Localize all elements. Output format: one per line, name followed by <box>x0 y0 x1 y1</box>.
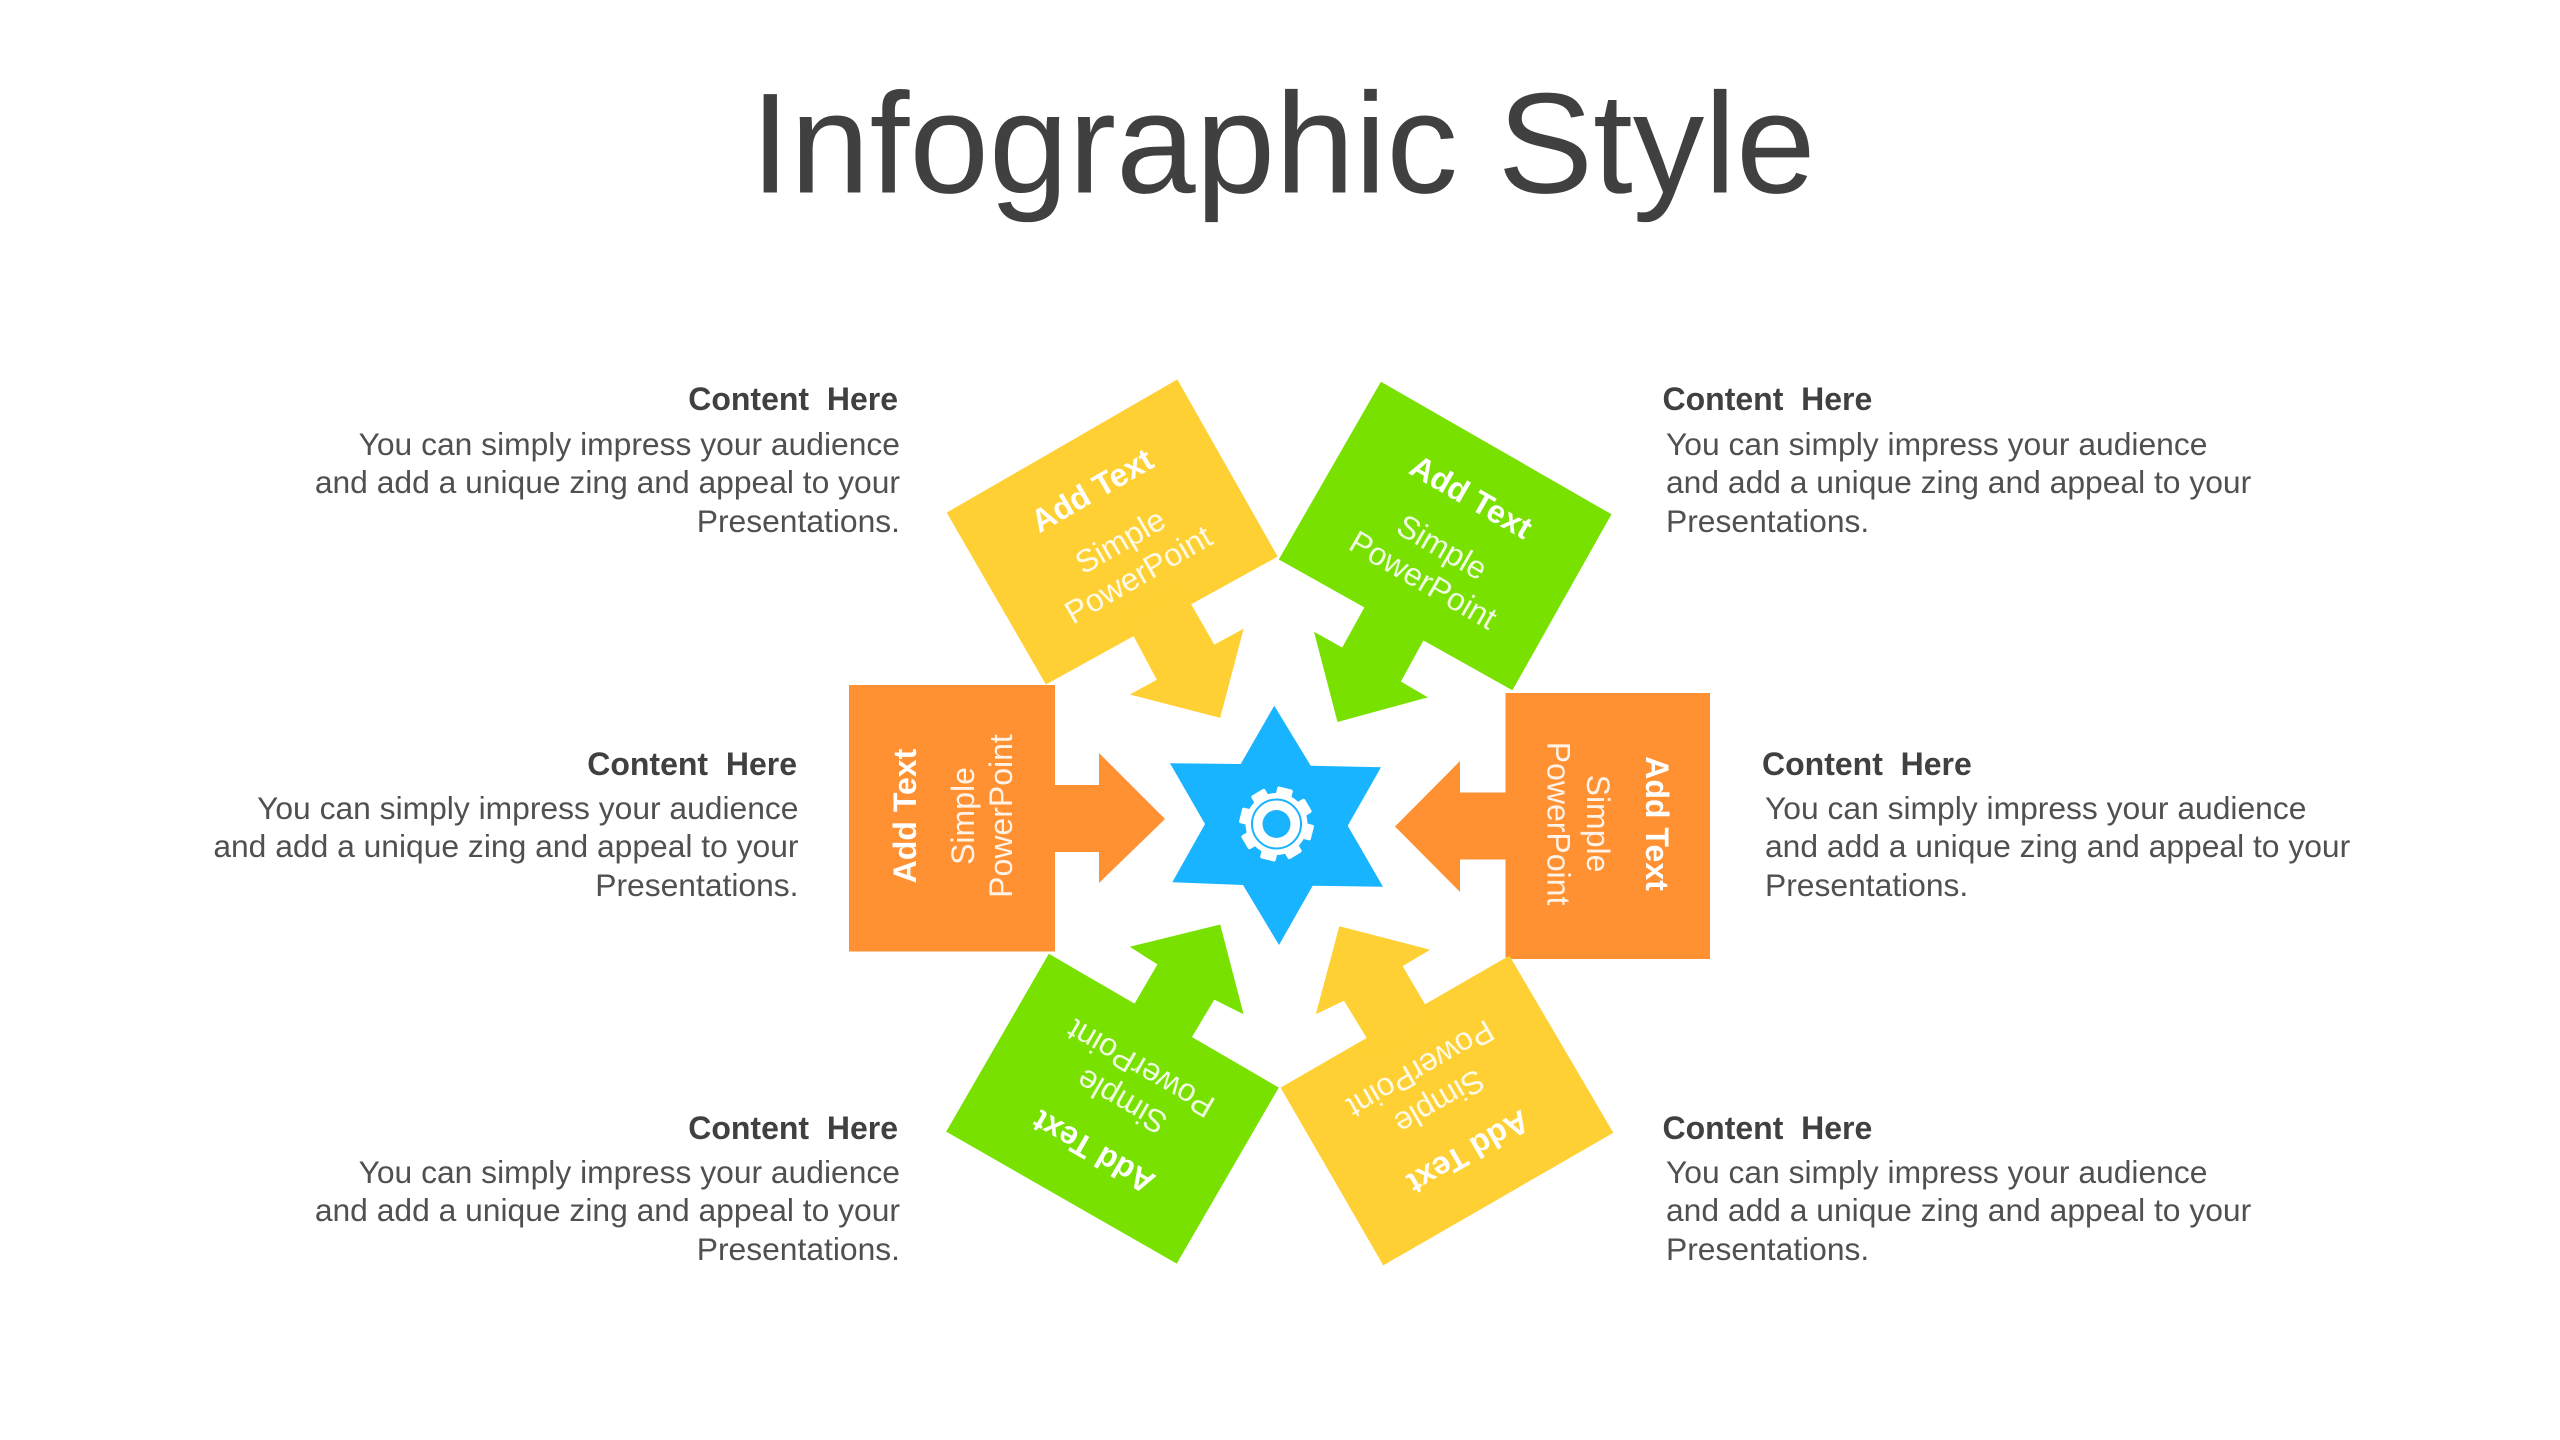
text block: bottom left: and add a unique zing and appeal to your <box>315 1192 900 1228</box>
text block: middle left: Content Here <box>587 746 797 782</box>
text block: bottom right: and add a unique zing and appeal to your <box>1666 1192 2252 1228</box>
left box text <box>887 734 1019 898</box>
text block: top left: Presentations. <box>697 503 900 539</box>
top-left box shape <box>947 379 1278 684</box>
icon: gear <box>1239 786 1314 862</box>
bottom-left arrow <box>1125 924 1244 1052</box>
text block: bottom left <box>315 1110 900 1267</box>
top-right arrow <box>1314 590 1433 722</box>
text block: middle left <box>213 746 799 903</box>
left box text: PowerPoint <box>983 734 1019 898</box>
text block: top right <box>1662 381 2252 539</box>
text block: top right: and add a unique zing and appeal to your <box>1666 464 2252 500</box>
left box text: Add Text <box>887 748 923 883</box>
bottom-left box text: PowerPoint <box>1061 1012 1221 1125</box>
text block: top left <box>315 381 900 539</box>
panel: right orange arrow box <box>1395 693 1710 959</box>
panel: bottom-right yellow arrow box <box>1281 926 1613 1265</box>
bottom-left box text <box>1013 1012 1221 1208</box>
bottom-right box shape <box>1281 956 1613 1265</box>
text block: middle left: Presentations. <box>595 867 798 903</box>
text block: bottom left: Presentations. <box>697 1231 900 1267</box>
bottom-right box text: Add Text <box>1401 1103 1536 1202</box>
text block: bottom right: Content Here <box>1662 1110 1872 1146</box>
text block: bottom right: You can simply impress your audience <box>1666 1154 2207 1190</box>
text block: bottom right <box>1662 1110 2252 1267</box>
bottom-left box text: Simple <box>1070 1061 1173 1142</box>
text block: top left: You can simply impress your audience <box>359 426 900 462</box>
left box shape <box>849 685 1055 952</box>
text block: top right: Content Here <box>1662 381 1872 417</box>
text block: bottom right: Presentations. <box>1666 1231 1869 1267</box>
text block: middle left: You can simply impress your audience <box>257 790 798 826</box>
bottom-right box text <box>1341 1013 1548 1209</box>
top-left box text: PowerPoint <box>1058 518 1218 631</box>
top-right box text: Simple <box>1391 507 1494 587</box>
text block: middle left: and add a unique zing and appeal to your <box>213 828 799 864</box>
text block: middle right <box>1762 746 2351 903</box>
panel: top-left yellow arrow box <box>947 379 1278 718</box>
bottom-right box text: Simple <box>1388 1062 1491 1142</box>
top-left arrow <box>1125 590 1244 718</box>
bottom-right arrow <box>1316 926 1436 1055</box>
left arrow <box>1050 753 1165 883</box>
right box text: PowerPoint <box>1541 742 1577 905</box>
panel: top-right green arrow box <box>1279 382 1612 722</box>
text block: bottom left: You can simply impress your audience <box>359 1154 900 1190</box>
top-left box text: Simple <box>1069 501 1171 581</box>
bottom-right box text: PowerPoint <box>1341 1013 1500 1126</box>
text block: top right: Presentations. <box>1666 503 1869 539</box>
right box text: Simple <box>1580 775 1616 872</box>
right box text: Add Text <box>1639 756 1675 891</box>
left box text: Simple <box>945 767 981 865</box>
title: Infographic Style <box>750 64 1816 224</box>
text block: bottom left: Content Here <box>688 1110 898 1146</box>
top-right box text: Add Text <box>1404 448 1539 546</box>
right box shape <box>1506 693 1710 959</box>
top-left box text: Add Text <box>1025 441 1160 540</box>
top-left box text <box>1010 435 1218 631</box>
bottom-left box text: Add Text <box>1026 1103 1161 1201</box>
text block: top left: Content Here <box>688 381 898 417</box>
panel: bottom-left green arrow box <box>946 924 1279 1264</box>
text block: middle right: and add a unique zing and appeal to your <box>1765 828 2351 864</box>
text block: middle right: You can simply impress your audience <box>1765 790 2306 826</box>
text block: middle right: Content Here <box>1762 746 1972 782</box>
panel: left orange arrow box <box>849 685 1165 952</box>
top-right box text: PowerPoint <box>1343 523 1503 636</box>
right arrow <box>1395 761 1510 892</box>
text block: top left: and add a unique zing and appeal to your <box>315 464 900 500</box>
right box text <box>1541 742 1675 905</box>
center blue star <box>1170 706 1383 945</box>
top-right box shape <box>1279 382 1612 690</box>
text block: middle right: Presentations. <box>1765 867 1968 903</box>
top-right box text <box>1343 440 1551 636</box>
text block: top right: You can simply impress your audience <box>1666 426 2207 462</box>
bottom-left box shape <box>946 954 1279 1264</box>
